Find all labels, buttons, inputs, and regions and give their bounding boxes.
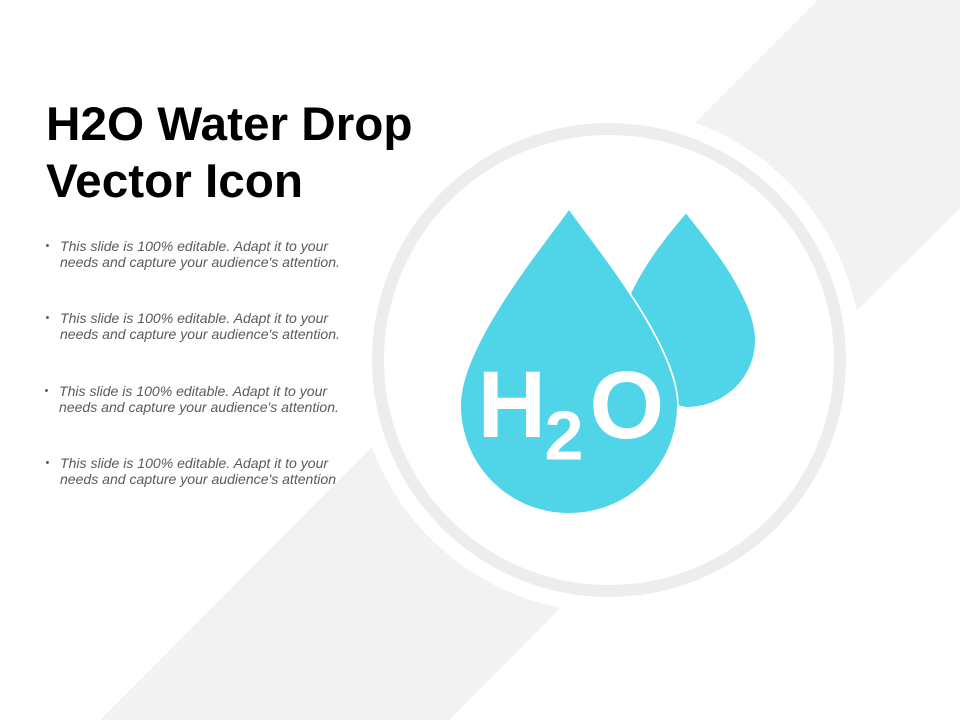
text block 4: This slide is 100% editable. Adapt it to your	[60, 455, 328, 471]
text block 1: needs and capture your audience's attention.	[60, 254, 340, 270]
text block 3: This slide is 100% editable. Adapt it to your	[59, 383, 327, 399]
title: Vector Icon	[46, 155, 303, 208]
H2O label: O	[590, 352, 664, 459]
text block 4: needs and capture your audience's attention	[60, 471, 336, 487]
text block 2: This slide is 100% editable. Adapt it to your	[60, 310, 328, 326]
text: •	[46, 312, 49, 324]
H2O label: 2	[544, 396, 583, 474]
ring	[378, 129, 840, 591]
text block 4	[46, 455, 336, 487]
text block 3: needs and capture your audience's attention.	[59, 399, 339, 415]
H2O label	[478, 352, 664, 474]
text: •	[44, 385, 48, 397]
text block 1: This slide is 100% editable. Adapt it to your	[60, 238, 328, 254]
icon: back water drop	[630, 214, 755, 407]
white gap circle	[356, 108, 862, 612]
text block 2: needs and capture your audience's attention.	[60, 326, 340, 342]
text block 3	[44, 383, 339, 415]
text: •	[46, 457, 49, 469]
icon: front water drop	[461, 210, 677, 513]
title	[46, 98, 413, 208]
text block 2	[46, 310, 340, 342]
title: H2O Water Drop	[46, 98, 413, 151]
H2O label: H	[478, 352, 546, 458]
upper diagonal band	[610, 0, 960, 417]
lower diagonal band	[100, 330, 670, 720]
text: •	[46, 240, 49, 252]
text block 1	[46, 238, 340, 270]
